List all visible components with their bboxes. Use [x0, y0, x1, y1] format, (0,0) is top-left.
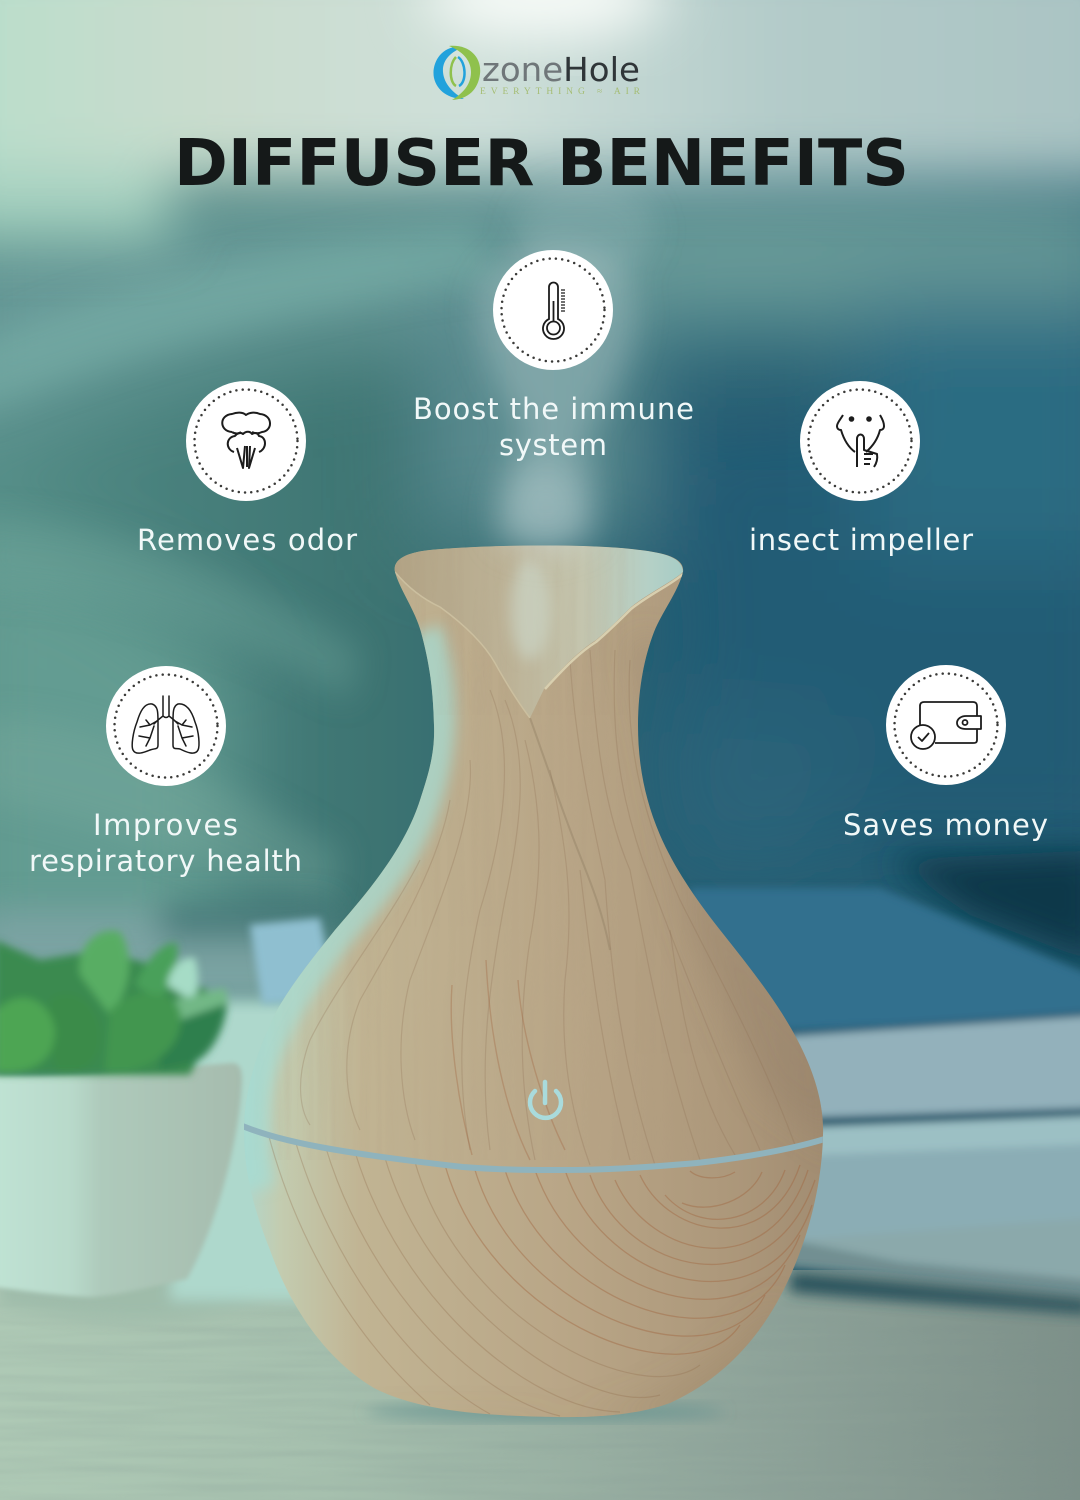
- benefit: removes odor: [137, 381, 357, 557]
- top window band: [0, 0, 1080, 240]
- label: Boost the immune: [413, 392, 694, 426]
- lip interior: [395, 545, 683, 718]
- right shading: [702, 915, 816, 1086]
- label: Saves money: [843, 808, 1048, 842]
- petal edges: [545, 574, 683, 689]
- label: Removes odor: [137, 523, 357, 557]
- plant and pot: [0, 931, 242, 1297]
- table surface: [0, 1270, 1080, 1500]
- label: insect impeller: [749, 523, 973, 557]
- benefit: improves respiratory health: [29, 666, 302, 878]
- icon: lungs: [132, 696, 199, 753]
- dark book shadow: [0, 850, 1080, 1010]
- icon: power symbol: [530, 1082, 561, 1118]
- mist: [478, 180, 655, 555]
- logo wordmark: zoneHole: [482, 50, 640, 89]
- benefit: saves money: [843, 665, 1048, 842]
- label: respiratory health: [29, 844, 302, 878]
- label: [413, 392, 694, 462]
- books: [250, 888, 1080, 1298]
- label: Improves: [93, 808, 238, 842]
- label: system: [499, 428, 607, 462]
- mint highlight on left edge: [247, 632, 435, 1190]
- vertical grain, neck and upper body: [301, 650, 795, 1165]
- icon: odor cloud: [222, 413, 270, 468]
- icon: wallet with clock: [911, 702, 981, 749]
- label: [29, 808, 302, 878]
- swirl grain, lower body: [445, 1165, 815, 1354]
- plant pot: [0, 1063, 242, 1297]
- logo mark: [433, 46, 480, 100]
- logo tagline: EVERYTHING ≈ AIR: [480, 87, 641, 97]
- icon: thermometer: [543, 282, 565, 339]
- logo: [433, 46, 641, 100]
- vase body: [230, 530, 840, 1430]
- succulent leaves: [0, 931, 228, 1075]
- diffuser vase: [230, 530, 840, 1430]
- cushion folds: [0, 225, 500, 910]
- benefit: insect impeller: [749, 381, 973, 557]
- benefit: boost the immune system: [413, 250, 694, 462]
- icon: face with finger on lips: [837, 415, 884, 467]
- title: DIFFUSER BENEFITS: [174, 127, 909, 201]
- glowing ring: [240, 1125, 828, 1170]
